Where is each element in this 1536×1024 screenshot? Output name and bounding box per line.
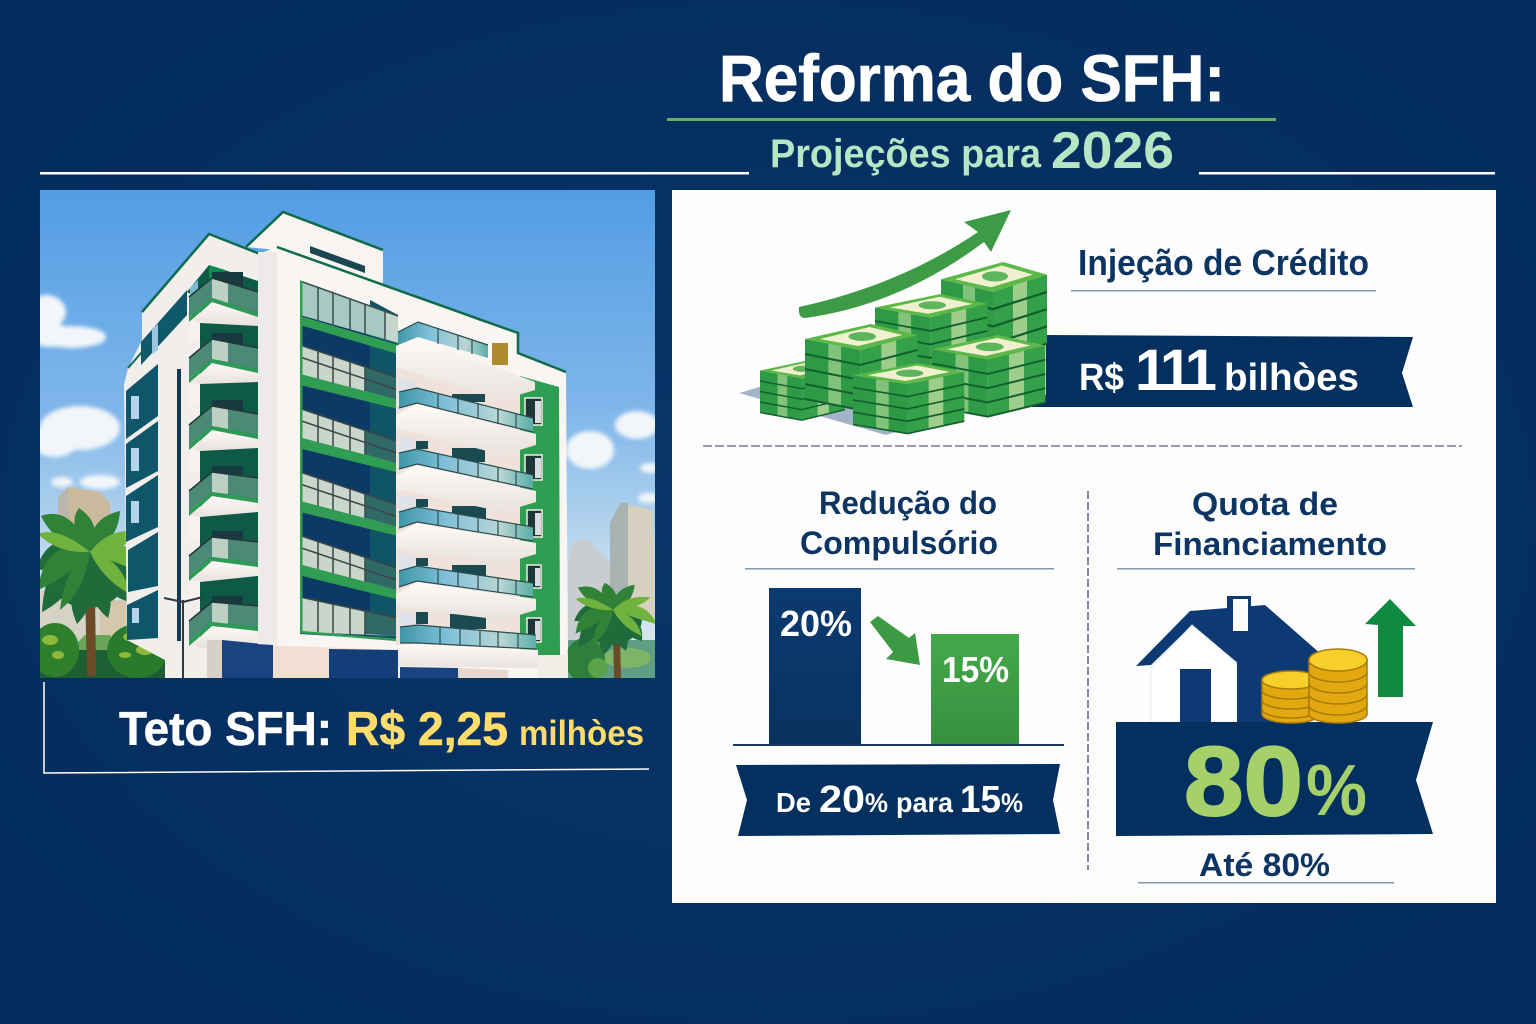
banner: R$ 111 bilhões: R$: [1079, 357, 1124, 399]
caption: Teto SFH: Teto SFH:: [119, 702, 332, 755]
banner: 80%: 80: [1184, 726, 1303, 836]
banner: R$ 111 bilhões: 111: [1135, 338, 1216, 403]
side windows: [525, 398, 542, 642]
section: credit injection: [739, 210, 1413, 435]
title: 2026: [1051, 122, 1174, 180]
bar chart: 20% to 15%: 20%: [780, 603, 852, 644]
caption: Teto SFH: R$ 2,25: [346, 702, 508, 755]
greenery: [40, 635, 655, 678]
icon: gold coins: [1262, 649, 1367, 723]
palm left: [40, 508, 127, 676]
label: Até 80%: Até 80%: [1199, 847, 1330, 883]
ribbon: De 20% para 15%: [736, 764, 1060, 836]
clouds: [26, 295, 660, 503]
ribbon: De 20% para 15%: %: [865, 788, 888, 818]
icon: house: [1136, 596, 1322, 722]
left balconies: [189, 272, 258, 648]
heading: Redução do Compulsório: Redução do: [819, 485, 997, 521]
banner: R$ 111 bilhões: bilhòes: [1224, 357, 1359, 399]
title: Projeções para: [770, 132, 1042, 176]
heading: Redução do Compulsório: [745, 485, 1054, 570]
ribbon: De 20% para 15%: 15: [960, 779, 1001, 821]
bushes: [31, 623, 608, 682]
section: financing quota: [1116, 486, 1433, 884]
banner: 80%: %: [1306, 751, 1367, 831]
banner: 80%: [1116, 722, 1433, 836]
ribbon: De 20% para 15%: 20: [819, 779, 865, 821]
panel: building illustration: [26, 190, 660, 682]
heading: Redução do Compulsório: Compulsório: [800, 525, 998, 561]
right balconies: [396, 322, 538, 668]
palm right: [574, 583, 657, 678]
icon: growth arrow: [799, 210, 1011, 318]
icon: up arrow: [1365, 599, 1416, 697]
title: Reforma do SFH:: [719, 41, 1225, 115]
distant towers: [40, 487, 655, 640]
street lamp: [164, 597, 203, 678]
panel: metrics: [672, 190, 1496, 903]
heading: Quota de Financiamento: [1117, 486, 1415, 570]
apartment building: [124, 212, 568, 678]
heading: Injeção de Crédito: Injeção de Crédito: [1078, 242, 1369, 283]
heading: Quota de Financiamento: Financiamento: [1153, 526, 1387, 562]
caption: Teto SFH: milhòes: [519, 714, 644, 753]
front windows: [300, 281, 398, 640]
bar chart: 20% to 15%: [733, 588, 1064, 746]
icon: money stacks: [739, 262, 1047, 435]
caption: Teto SFH: [44, 682, 649, 773]
bar chart: 20% to 15%: 15%: [942, 649, 1009, 690]
ribbon: De 20% para 15%: para: [896, 787, 953, 818]
banner: R$ 111 bilhões: [1007, 335, 1413, 407]
ribbon: De 20% para 15%: %: [1001, 788, 1023, 818]
ribbon: De 20% para 15%: De: [776, 787, 811, 818]
heading: Quota de Financiamento: Quota de: [1192, 486, 1338, 522]
section: compulsory reduction: [733, 485, 1064, 836]
title: [40, 41, 1495, 180]
